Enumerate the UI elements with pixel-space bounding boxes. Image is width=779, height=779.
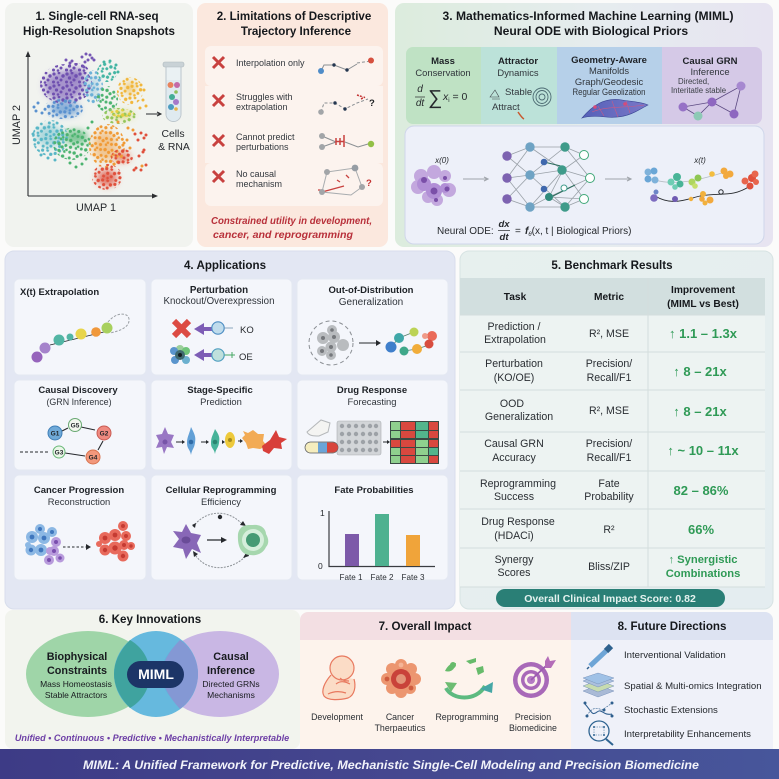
text: biophysical constraints: Constraints (47, 665, 107, 677)
row: causal GRN accuracy: Recall/F1 (587, 452, 631, 464)
row: causal GRN accuracy: Causal GRN (484, 438, 544, 450)
item: spatial and multi-omics integration: Spatial & Multi-omics Integration (624, 681, 762, 692)
panel 5: benchmark results (460, 251, 773, 609)
row: struggles with extrapolation: extrapolation (236, 102, 288, 112)
tagline: Unified • Continuous • Predictive • Mechanistically Interpretable (15, 733, 289, 743)
prior: mass conservation: = 0 (450, 91, 468, 103)
icon: pipette (587, 646, 611, 669)
row: drug response: (HDACi) (494, 530, 534, 542)
footer banner: MIML: A Unified Framework for Predictive, Mechanistic Single-Cell Modeling and Precision Biomedicine (83, 758, 699, 772)
chart: fate probabilities bars: Fate 2 (371, 573, 394, 582)
text: biophysical constraints: Mass Homeostasis (40, 679, 112, 689)
text: causal inference (202, 651, 260, 700)
row: causal GRN accuracy: Precision/ (586, 438, 632, 450)
prior: attractor dynamics: Dynamics (497, 67, 539, 78)
row: synergy scores: Scores (498, 567, 530, 579)
heading: panel 5 title: 5. Benchmark Results (551, 259, 673, 272)
card: causal discovery: G3 (55, 450, 64, 456)
formula: neural ODE: (x, t | Biological Priors) (532, 226, 631, 237)
text: biophysical constraints: Stable Attractors (45, 690, 107, 700)
card: perturbation: KO (240, 325, 254, 336)
formula: dx/dt fraction: dx (498, 219, 510, 230)
formula: neural ODE: = (515, 226, 521, 237)
row: cannot predict perturbations: Cannot predict (236, 132, 295, 142)
table header: Metric (594, 292, 624, 303)
row: struggles with extrapolation (205, 86, 383, 125)
label: cancer therapeutics: Therpaeutics (375, 723, 426, 733)
diagram: output trajectory (644, 168, 759, 206)
row: synergy scores: ↑ Synergistic (668, 554, 738, 566)
MIML badge: MIML (138, 666, 174, 682)
row: reprogramming success (480, 478, 729, 503)
card: stage-specific prediction: Stage-Specific (187, 385, 253, 396)
text: causal inference: Directed GRNs (202, 679, 260, 689)
card: fate probabilities (297, 475, 448, 582)
heading: panel 2 title: 2. Limitations of Descriptive (217, 10, 372, 23)
row: drug response: Drug Response (481, 516, 555, 528)
row: drug response (481, 516, 714, 542)
footer banner (0, 749, 779, 779)
row: perturbation: (KO/OE) (494, 372, 534, 384)
chart: fate probabilities bars: 1 (320, 508, 325, 518)
label: x(0): x(0) (434, 156, 449, 165)
heading: panel 3 title: Neural ODE with Biological Priors (494, 24, 688, 38)
card: drug response forecasting: Drug Response (337, 385, 407, 396)
panel 7: overall impact (300, 612, 571, 749)
label: precision biomedicine: Biomedicine (509, 723, 557, 733)
prior: attractor dynamics: Attract (492, 102, 520, 113)
row: OOD generalization: Generalization (485, 411, 553, 423)
item: interpretability enhancements: Interpretability Enhancements (624, 729, 751, 740)
heading: panel 6 title: 6. Key Innovations (99, 613, 201, 626)
row: synergy scores: Bliss/ZIP (588, 561, 630, 573)
card: causal discovery: (GRN Inference) (46, 397, 112, 407)
axis label: UMAP 1: UMAP 1 (76, 202, 116, 214)
label: cells and RNA: Cells (161, 129, 185, 140)
axis label: UMAP 2: UMAP 2 (11, 105, 23, 145)
row: interpolation only: Interpolation only (236, 58, 305, 68)
chart: fate probabilities bars: 0 (318, 561, 323, 571)
prior: geometry-aware manifolds: Geometry-Aware (571, 55, 647, 66)
callout: constrained utility (211, 216, 372, 241)
prior: attractor dynamics: Stable (505, 87, 532, 98)
row: drug response: R² (603, 524, 615, 536)
card: out-of-distribution generalization: Generalization (339, 297, 403, 308)
diagram: venn of biophysical constraints, causal inference and MIML (26, 631, 279, 717)
row: prediction: Prediction / (488, 321, 541, 333)
table header: (MIML vs Best) (667, 299, 739, 310)
icon: magnifier with graph (589, 721, 613, 745)
row: no causal mechanism: ? (366, 178, 372, 189)
icon: stochastic curves (584, 702, 614, 718)
card: causal discovery: G2 (100, 430, 109, 438)
row: synergy scores: Synergy (495, 554, 534, 566)
row: prediction (484, 321, 738, 346)
icon: test tube with cells (163, 62, 184, 122)
item: stochastic extensions: Stochastic Extensions (624, 705, 718, 716)
prior: causal GRN inference: Interitatle stable (671, 86, 726, 95)
prior: geometry-aware manifolds: Regular Geeolization (572, 86, 646, 97)
row: struggles with extrapolation: ? (369, 98, 375, 109)
prior: geometry-aware manifolds: Graph/Geodesic (575, 76, 643, 87)
table header (504, 285, 739, 310)
heading: panel 3 title: 3. Mathematics-Informed Machine Learning (MIML) (443, 9, 733, 23)
card: extrapolation: X(t) Extrapolation (20, 287, 99, 298)
card: cellular reprogramming efficiency (151, 475, 292, 580)
row: synergy scores (495, 554, 740, 580)
row: reprogramming success: Reprogramming (480, 478, 556, 490)
card: cancer progression reconstruction: Reconstruction (48, 496, 110, 507)
icon: cancer therapeutics (381, 659, 421, 698)
card: causal discovery: G1 (51, 430, 60, 438)
text: biophysical constraints (40, 651, 112, 700)
label: cells and RNA: & RNA (158, 142, 190, 153)
row: reprogramming success: Probability (584, 491, 634, 503)
text: causal inference: Inference (207, 665, 255, 677)
icon: initial cell cluster (411, 165, 456, 206)
card: causal discovery: G4 (89, 454, 98, 462)
arrow: input to network (463, 177, 488, 181)
text: biophysical constraints: Biophysical (47, 651, 107, 663)
formula: dx/dt fraction: dt (500, 232, 509, 243)
label: x(t): x(t) (693, 156, 706, 165)
row: struggles with extrapolation: Struggles with (236, 92, 293, 102)
card: drug response forecasting: Forecasting (348, 396, 396, 407)
row: cannot predict perturbations (205, 125, 383, 163)
row: drug response: 66% (688, 522, 714, 537)
prior: mass conservation (406, 47, 482, 124)
table header: Task (504, 292, 527, 303)
table: benchmark results (460, 278, 765, 587)
row: prediction: R², MSE (589, 328, 629, 340)
panel 2: limitations of trajectory inference (197, 3, 388, 247)
heading: panel 1 title: 1. Single-cell RNA-seq (35, 10, 159, 23)
row: no causal mechanism: No causal (236, 169, 276, 179)
chart: fate probabilities bars (318, 508, 435, 582)
pill: overall clinical impact score (496, 589, 725, 607)
formula: neural ODE: θ (528, 232, 532, 238)
card: extrapolation (14, 279, 146, 375)
callout: constrained utility: Constrained utility in development, (211, 216, 372, 227)
heading: panel 1 title: High-Resolution Snapshots (23, 25, 175, 38)
icon: development (323, 656, 355, 700)
row: perturbation: ↑ 8 – 21x (673, 364, 728, 379)
label: precision biomedicine: Precision (515, 712, 551, 722)
row: no causal mechanism (205, 163, 383, 206)
icon: stacked layers (583, 673, 614, 697)
prior: causal GRN inference: Causal GRN (683, 56, 738, 67)
text: causal inference: Causal (213, 651, 249, 663)
text: causal inference: Mechanisms (207, 690, 255, 700)
panel 4: applications (5, 251, 455, 609)
card: out-of-distribution generalization: Out-of-Distribution (329, 285, 414, 296)
card: drug response forecasting (297, 380, 448, 470)
heading: panel 8 title: 8. Future Directions (618, 620, 726, 633)
label: reprogramming: Reprogramming (435, 712, 499, 722)
panel 3: mathematics-informed machine learning (395, 3, 773, 247)
prior: geometry-aware manifolds: Manifolds (589, 65, 629, 76)
prior: mass conservation: Mass (431, 56, 455, 67)
card: cancer progression reconstruction (14, 475, 146, 580)
prior: attractor dynamics: Attractor (498, 56, 538, 67)
row: perturbation (485, 358, 728, 384)
prior: attractor dynamics (481, 47, 557, 124)
row: perturbation: Perturbation (485, 358, 543, 370)
table header: Improvement (671, 285, 736, 296)
card: causal discovery: G5 (71, 422, 80, 430)
formula: neural ODE: f (525, 226, 530, 237)
prior: causal GRN inference: Inference (690, 66, 730, 77)
heading: panel 2 title: Trajectory Inference (241, 25, 352, 38)
prior: mass conservation: d (417, 84, 423, 95)
row: reprogramming success: Success (494, 491, 534, 503)
card: causal discovery (14, 380, 146, 470)
panel 8: future directions (571, 612, 773, 749)
prior: mass conservation: x (442, 91, 449, 103)
row: cannot predict perturbations: perturbations (236, 142, 289, 152)
card: out-of-distribution generalization (297, 279, 448, 375)
card: cancer progression reconstruction: Cancer Progression (34, 485, 124, 496)
card: perturbation (151, 279, 292, 375)
heading: panel 7 title: 7. Overall Impact (379, 620, 472, 633)
chart axes (26, 51, 158, 198)
prior: mass conservation: dt (416, 98, 425, 109)
MIML badge (127, 661, 184, 688)
row: causal GRN accuracy: Accuracy (492, 452, 536, 464)
prior: geometry-aware manifolds (557, 47, 662, 124)
prior: mass conservation: i (448, 98, 450, 104)
row: OOD generalization: ↑ 8 – 21x (673, 404, 728, 419)
row: OOD generalization (485, 398, 728, 423)
label: development: Development (311, 712, 363, 722)
heading: panel 4 title: 4. Applications (184, 259, 266, 272)
prior: mass conservation: Conservation (415, 67, 471, 78)
icon: reprogramming cycle (445, 658, 493, 698)
row: perturbation: Recall/F1 (587, 372, 631, 384)
row: reprogramming success: 82 – 86% (674, 483, 729, 498)
card: cellular reprogramming efficiency: Cellular Reprogramming (166, 485, 277, 496)
box: neural ODE schematic (405, 126, 764, 244)
formula: neural ODE: Neural ODE: (437, 226, 494, 237)
row: perturbation: Precision/ (586, 358, 632, 370)
card: stage-specific prediction (151, 380, 292, 470)
row: reprogramming success: Fate (598, 478, 620, 490)
row: OOD generalization: R², MSE (589, 405, 629, 417)
item: interventional validation: Interventional Validation (624, 650, 726, 661)
row: OOD generalization: OOD (500, 398, 524, 410)
panel 6: key innovations (5, 610, 300, 749)
chart: fate probabilities bars: Fate 1 (340, 573, 363, 582)
arrow to test tube (146, 112, 161, 116)
diagram: neural network (502, 142, 594, 212)
row: synergy scores: Combinations (666, 568, 740, 580)
card: cellular reprogramming efficiency: Efficiency (201, 496, 241, 507)
card: fate probabilities: Fate Probabilities (334, 485, 414, 496)
prior: mass conservation: ∑ (428, 87, 442, 109)
callout: constrained utility: cancer, and reprogramming (213, 230, 353, 241)
icon: precision target (513, 656, 556, 698)
prior: causal GRN inference (662, 47, 762, 124)
card: perturbation: OE (239, 352, 253, 363)
pill: overall clinical impact score: Overall Clinical Impact Score: 0.82 (524, 593, 696, 605)
label: cancer therapeutics: Cancer (386, 712, 414, 722)
row: interpolation only (205, 46, 383, 86)
panel 1: single-cell RNA-seq (5, 3, 193, 247)
arrow: network to output (605, 177, 631, 181)
chart: fate probabilities bars: Fate 3 (402, 573, 425, 582)
prior: causal GRN inference: Directed, (678, 77, 709, 86)
row: prediction: Extrapolation (484, 334, 546, 346)
card: causal discovery: Causal Discovery (38, 385, 118, 396)
chart: UMAP scatter of cell clusters (32, 54, 146, 190)
card: stage-specific prediction: Prediction (200, 396, 242, 407)
row: causal GRN accuracy (484, 438, 739, 464)
card: perturbation: Knockout/Overexpression (164, 296, 274, 307)
row: causal GRN accuracy: ↑ ~ 10 – 11x (667, 443, 739, 458)
row: prediction: ↑ 1.1 – 1.3x (669, 326, 738, 341)
row: no causal mechanism: mechanism (236, 179, 282, 189)
card: perturbation: Perturbation (190, 285, 248, 296)
